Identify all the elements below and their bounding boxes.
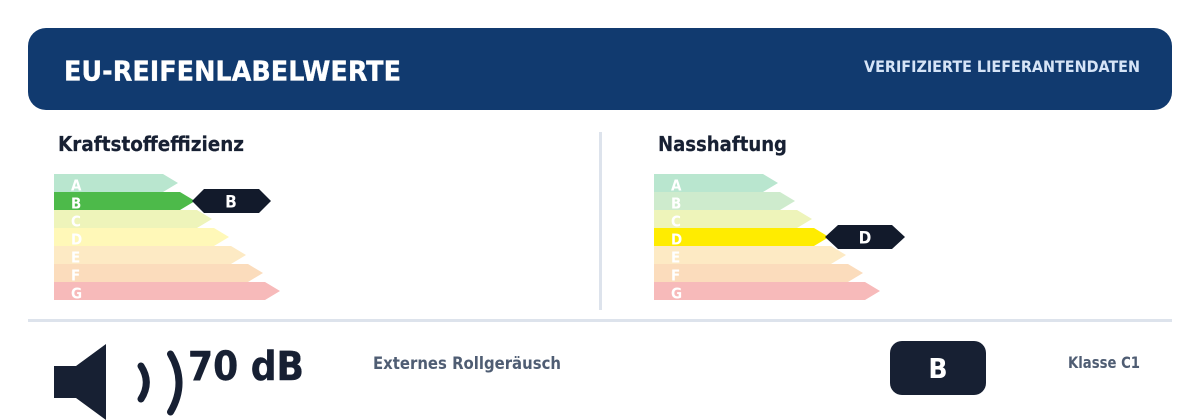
marker: grade D bbox=[825, 225, 905, 249]
header banner bbox=[28, 28, 1172, 110]
rating scale: fuel efficiency: G bbox=[71, 284, 82, 302]
tyre class label: Klasse C1 bbox=[1068, 353, 1140, 372]
rating scale: fuel efficiency: D bbox=[71, 230, 82, 248]
rating scale: wet grip: E bbox=[671, 248, 680, 266]
header subtitle: VERIFIZIERTE LIEFERANTENDATEN bbox=[864, 57, 1140, 76]
rating scale: wet grip: F bbox=[671, 266, 680, 284]
rating scale: wet grip: C bbox=[671, 212, 681, 230]
rating scale: wet grip: A bbox=[671, 176, 682, 194]
rating scale: fuel efficiency: A bbox=[71, 176, 82, 194]
heading: wet grip: Nasshaftung bbox=[658, 132, 787, 156]
heading: fuel efficiency: Kraftstoffeffizienz bbox=[58, 132, 244, 156]
panel: fuel efficiency bbox=[54, 132, 280, 302]
marker: grade D: D bbox=[859, 228, 871, 248]
marker: grade B: B bbox=[225, 192, 237, 212]
rating scale: wet grip: D bbox=[671, 230, 682, 248]
rating scale: fuel efficiency: C bbox=[71, 212, 81, 230]
noise value: 70 dB bbox=[188, 344, 304, 390]
rating scale: wet grip: B bbox=[671, 194, 681, 212]
noise label: Externes Rollgeräusch bbox=[373, 354, 561, 374]
rating scale: fuel efficiency bbox=[54, 174, 280, 302]
icon: speaker with sound waves bbox=[54, 344, 179, 420]
title: EU-REIFENLABELWERTE bbox=[64, 54, 401, 88]
noise class badge bbox=[890, 341, 986, 395]
marker: grade B bbox=[192, 189, 271, 213]
section divider bbox=[28, 319, 1172, 322]
rating scale: wet grip: G bbox=[671, 284, 682, 302]
panel: wet grip bbox=[654, 132, 905, 302]
rating scale: fuel efficiency: B bbox=[71, 194, 81, 212]
rating scale: wet grip bbox=[654, 174, 880, 302]
rating scale: fuel efficiency: F bbox=[71, 266, 80, 284]
panel divider bbox=[599, 132, 602, 310]
rating scale: fuel efficiency: E bbox=[71, 248, 80, 266]
noise class badge: B bbox=[928, 352, 948, 385]
